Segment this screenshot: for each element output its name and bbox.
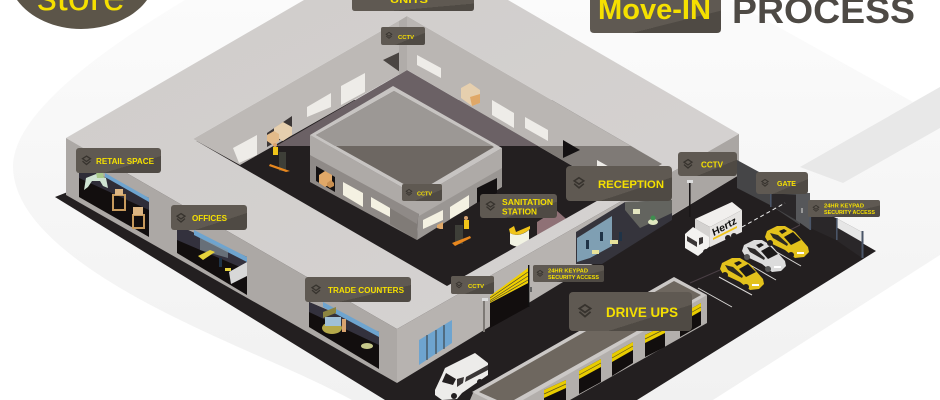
right wall end shade [668, 134, 739, 217]
truck logo: Hertz [710, 216, 739, 239]
cctv pole right [687, 180, 693, 217]
yellow car front [720, 258, 764, 290]
silver car [742, 240, 786, 272]
yellow roller door [490, 265, 532, 328]
label cctv lower: CCTV [468, 284, 484, 290]
retail window [79, 165, 149, 237]
label drive ups [569, 292, 692, 331]
van [435, 353, 488, 400]
parking lines [698, 247, 801, 307]
boxes upper left [267, 122, 292, 145]
boxes upper right [461, 83, 480, 106]
inner wall right [399, 16, 662, 218]
worker with pallet truck left [269, 143, 290, 172]
ground [55, 100, 876, 400]
access road line [690, 225, 800, 283]
label cctv right: CCTV [701, 160, 724, 170]
background band right [800, 87, 940, 183]
offices window [177, 225, 247, 295]
label drive ups: DRIVE UPS [606, 305, 678, 320]
label trade counters: TRADE COUNTERS [328, 286, 405, 295]
label gate: GATE [777, 181, 796, 188]
side wall [397, 134, 739, 383]
sanitation station [509, 226, 530, 247]
label retail space: RETAIL SPACE [96, 157, 155, 166]
gate wall [737, 160, 800, 225]
label sanitation station [480, 194, 557, 218]
label retail space [76, 148, 161, 173]
drive ups block [470, 277, 707, 400]
courtyard upper floor [276, 70, 538, 146]
label keypad right: 24HR KEYPAD [824, 204, 864, 210]
label keypad lower: 24HR KEYPAD [548, 268, 588, 274]
label cctv right [678, 152, 737, 176]
label keypad lower [533, 265, 604, 282]
gate dashed line [742, 203, 785, 227]
central block [310, 86, 502, 240]
label sanitation station: SANITATION [502, 198, 553, 207]
title move-in [590, 0, 721, 33]
label gate [756, 172, 808, 194]
label reception: RECEPTION [598, 179, 664, 191]
label keypad lower: SECURITY ACCESS [548, 275, 599, 281]
label cctv top [381, 27, 425, 45]
long front wall [66, 138, 397, 383]
trade counters window [309, 302, 379, 369]
boxes at central block [319, 171, 334, 188]
label offices [171, 205, 247, 230]
label cctv top: CCTV [398, 35, 414, 41]
label keypad right [808, 200, 880, 217]
label units [352, 0, 474, 11]
label cctv central: CCTV [417, 192, 432, 198]
label cctv lower [451, 276, 494, 294]
box by shutter [437, 222, 443, 229]
logo [17, 0, 147, 29]
inner wall left [193, 16, 407, 165]
sanitation floor patch [537, 210, 572, 245]
gate and fence [770, 193, 864, 258]
worker with pallet truck right [452, 216, 471, 246]
truck [685, 202, 742, 256]
end wall window [419, 320, 452, 365]
cctv pole lower [482, 298, 488, 332]
yellow car back [765, 226, 809, 258]
reception glass [576, 200, 672, 264]
label cctv central [402, 184, 442, 201]
label keypad right: SECURITY ACCESS [824, 210, 875, 216]
roof [66, 0, 739, 329]
label trade counters [305, 277, 411, 302]
label reception [566, 166, 672, 201]
label sanitation station: STATION [502, 208, 537, 216]
label offices: OFFICES [192, 214, 228, 223]
